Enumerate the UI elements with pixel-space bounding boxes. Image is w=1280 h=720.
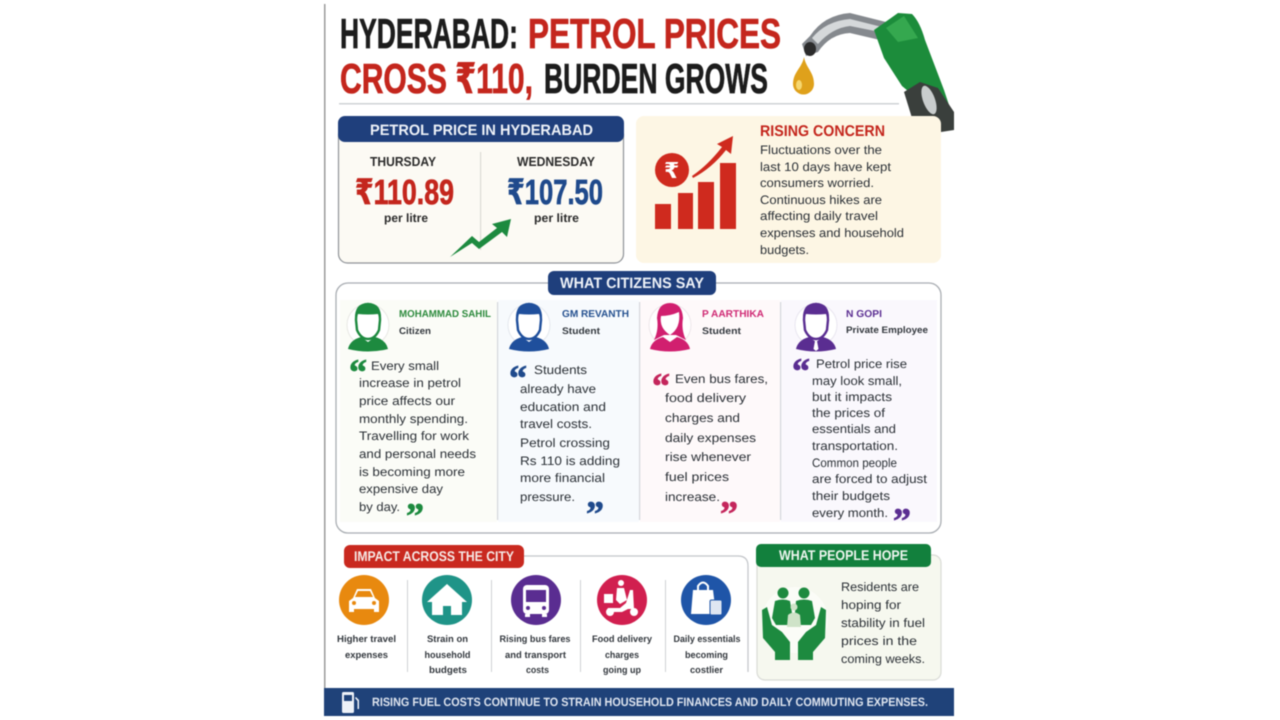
impact: household budgets: budgets bbox=[429, 665, 467, 676]
price: Wednesday: ₹107.50 bbox=[507, 173, 603, 212]
impact: daily essentials: becoming bbox=[685, 650, 728, 661]
citizen: N Gopi: Common people bbox=[812, 456, 897, 470]
price: Wednesday: per litre bbox=[534, 211, 579, 225]
impact: bus fares: costs bbox=[526, 665, 549, 676]
rising concern text: Continuous hikes are bbox=[760, 193, 882, 207]
hope text: Residents are bbox=[841, 580, 919, 594]
citizen: N Gopi: N GOPI bbox=[846, 309, 882, 320]
citizen: GM Revanth: ” bbox=[586, 494, 604, 534]
rising concern text: last 10 days have kept bbox=[760, 160, 892, 174]
citizen: N Gopi: the prices of bbox=[812, 406, 886, 420]
icon: bus bbox=[511, 575, 561, 625]
citizen: N Gopi: their budgets bbox=[812, 489, 890, 503]
citizen: GM Revanth: already have bbox=[520, 382, 596, 396]
rising concern text: consumers worried. bbox=[760, 176, 874, 190]
impact: bus fares bbox=[500, 575, 570, 676]
citizen: P Aarthika: rise whenever bbox=[665, 450, 751, 464]
citizen: N Gopi: transportation. bbox=[812, 439, 898, 453]
citizen: Mohammad Sahil: ” bbox=[406, 496, 424, 536]
citizen: N Gopi: essentials and bbox=[812, 422, 896, 436]
citizen: Mohammad Sahil: monthly spending. bbox=[359, 412, 468, 426]
citizen: N Gopi: Private Employee bbox=[846, 325, 928, 336]
hope text: hoping for bbox=[841, 598, 901, 612]
rising concern text: expenses and household bbox=[760, 226, 904, 240]
citizen: P Aarthika: charges and bbox=[665, 411, 740, 425]
citizen: P Aarthika: ” bbox=[720, 494, 738, 534]
heading: what people hope bbox=[756, 544, 931, 567]
icon: shopping bag bbox=[681, 575, 731, 625]
title: BURDEN GROWS bbox=[544, 55, 768, 102]
impact: travel expenses: Higher travel bbox=[337, 634, 396, 645]
impact: household budgets bbox=[422, 575, 472, 676]
citizen: P Aarthika: Student bbox=[702, 326, 742, 337]
citizen: N Gopi: but it impacts bbox=[812, 390, 892, 404]
impact: food delivery: charges bbox=[605, 650, 639, 661]
impact: daily essentials: Daily essentials bbox=[674, 634, 740, 645]
citizen: P Aarthika: food delivery bbox=[665, 391, 747, 405]
citizen: Mohammad Sahil: increase in petrol bbox=[359, 376, 461, 390]
citizen: GM Revanth: “ bbox=[509, 358, 527, 398]
citizen: GM Revanth: Petrol crossing bbox=[520, 436, 610, 450]
rising concern text: affecting daily travel bbox=[760, 209, 878, 223]
price: Thursday: per litre bbox=[384, 211, 428, 225]
hope text: stability in fuel bbox=[841, 616, 925, 630]
citizen: Mohammad Sahil: Every small bbox=[371, 359, 439, 373]
citizen: N Gopi: are forced to adjust bbox=[812, 472, 928, 486]
citizen: N Gopi: Petrol price rise bbox=[816, 357, 907, 371]
title: CROSS ₹110, bbox=[340, 55, 533, 102]
citizen: GM Revanth: Student bbox=[562, 326, 601, 337]
chart icon: rising rupee bars bbox=[655, 136, 736, 229]
impact: daily essentials: costlier bbox=[690, 665, 723, 676]
citizen: GM Revanth: education and bbox=[520, 400, 606, 414]
price: Wednesday bbox=[507, 154, 603, 225]
citizen: Mohammad Sahil: Travelling for work bbox=[359, 429, 470, 443]
impact: household budgets: Strain on bbox=[427, 634, 468, 645]
panel: what citizens say bbox=[336, 271, 941, 541]
citizen: N Gopi: ” bbox=[893, 501, 911, 541]
hope text: prices in the bbox=[841, 634, 917, 648]
heading: what people hope: WHAT PEOPLE HOPE bbox=[779, 547, 908, 563]
rising concern text bbox=[760, 143, 904, 257]
citizen: GM Revanth: pressure. bbox=[520, 490, 575, 504]
citizen: Mohammad Sahil: MOHAMMAD SAHIL bbox=[399, 309, 491, 320]
icon: car bbox=[339, 575, 389, 625]
hope text: coming weeks. bbox=[841, 652, 925, 666]
citizen: N Gopi: “ bbox=[792, 351, 810, 391]
impact: bus fares: Rising bus fares bbox=[500, 634, 570, 645]
citizen: P Aarthika: fuel prices bbox=[665, 470, 729, 484]
panel: petrol price bbox=[338, 116, 624, 263]
citizen: P Aarthika bbox=[649, 303, 768, 534]
citizen: Mohammad Sahil: expensive day bbox=[359, 482, 444, 496]
heading: impact across the city: IMPACT ACROSS THE CITY bbox=[354, 548, 515, 564]
impact: bus fares: and transport bbox=[505, 650, 567, 661]
citizen: N Gopi bbox=[792, 303, 928, 541]
impact: food delivery: going up bbox=[603, 665, 641, 676]
impact: travel expenses bbox=[337, 575, 396, 661]
citizen: Mohammad Sahil bbox=[347, 303, 491, 536]
citizen: GM Revanth: more financial bbox=[520, 471, 605, 485]
avatar: N Gopi bbox=[795, 303, 837, 352]
avatar: GM Revanth bbox=[508, 303, 550, 352]
impact: food delivery: Food delivery bbox=[592, 634, 653, 645]
heading: what citizens say: WHAT CITIZENS SAY bbox=[560, 275, 704, 292]
citizen: Mohammad Sahil: “ bbox=[349, 352, 367, 392]
citizen: Mohammad Sahil: Citizen bbox=[399, 326, 431, 337]
title: PETROL PRICES bbox=[528, 10, 781, 57]
citizen: Mohammad Sahil: price affects our bbox=[359, 394, 455, 408]
icon: family in hands bbox=[762, 587, 828, 660]
price panel header bbox=[338, 116, 624, 142]
citizen: GM Revanth: travel costs. bbox=[520, 417, 592, 431]
panel: what people hope bbox=[756, 544, 941, 680]
panel: rising concern bbox=[636, 116, 941, 263]
price: Wednesday: WEDNESDAY bbox=[517, 154, 595, 169]
citizen: P Aarthika: daily expenses bbox=[665, 431, 756, 445]
citizen: P Aarthika: P AARTHIKA bbox=[702, 309, 764, 320]
panel: rising concern: RISING CONCERN bbox=[760, 123, 885, 140]
avatar: Mohammad Sahil bbox=[347, 303, 389, 352]
citizen: N Gopi: may look small, bbox=[812, 374, 902, 388]
impact: daily essentials bbox=[674, 575, 740, 676]
price: Thursday bbox=[355, 154, 454, 225]
icon: fuel pump bbox=[342, 692, 359, 713]
rising concern text: budgets. bbox=[760, 243, 809, 257]
citizen: GM Revanth: GM REVANTH bbox=[562, 309, 629, 320]
icon: fuel nozzle and drop bbox=[793, 13, 954, 134]
chart icon: rising rupee bars: ₹ bbox=[664, 158, 679, 183]
heading: impact across the city bbox=[344, 545, 524, 568]
avatar: P Aarthika bbox=[649, 303, 691, 352]
hope text bbox=[841, 580, 925, 666]
footer banner bbox=[324, 688, 954, 716]
rising concern text: Fluctuations over the bbox=[760, 143, 882, 157]
citizen: Mohammad Sahil: is becoming more bbox=[359, 465, 465, 479]
footer banner: RISING FUEL COSTS CONTINUE TO STRAIN HOUSEHOLD FINANCES AND DAILY COMMUTING EXPENSES. bbox=[372, 695, 928, 709]
title bbox=[340, 10, 781, 102]
citizen: P Aarthika: Even bus fares, bbox=[675, 372, 768, 386]
impact: household budgets: household bbox=[424, 650, 471, 661]
citizen: GM Revanth bbox=[508, 303, 629, 534]
citizen: Mohammad Sahil: and personal needs bbox=[359, 447, 476, 461]
citizen: Mohammad Sahil: by day. bbox=[359, 500, 400, 514]
citizen: GM Revanth: Rs 110 is adding bbox=[520, 454, 620, 468]
citizen: P Aarthika: increase. bbox=[665, 490, 720, 504]
impact: food delivery bbox=[592, 575, 653, 676]
heading: what citizens say bbox=[548, 271, 716, 295]
impact: travel expenses: expenses bbox=[345, 650, 388, 661]
citizen: N Gopi: every month. bbox=[812, 506, 888, 520]
panel: impact across the city bbox=[337, 545, 748, 676]
citizen: P Aarthika: “ bbox=[652, 366, 670, 406]
citizen: GM Revanth: Students bbox=[534, 363, 587, 377]
price: Thursday: THURSDAY bbox=[370, 154, 436, 169]
title: HYDERABAD: bbox=[340, 10, 518, 57]
icon: house bbox=[422, 575, 472, 625]
price: Thursday: ₹110.89 bbox=[355, 173, 454, 212]
icon: delivery scooter bbox=[597, 575, 647, 625]
arrow: price rise bbox=[450, 219, 511, 257]
price panel header: PETROL PRICE IN HYDERABAD bbox=[370, 122, 593, 139]
